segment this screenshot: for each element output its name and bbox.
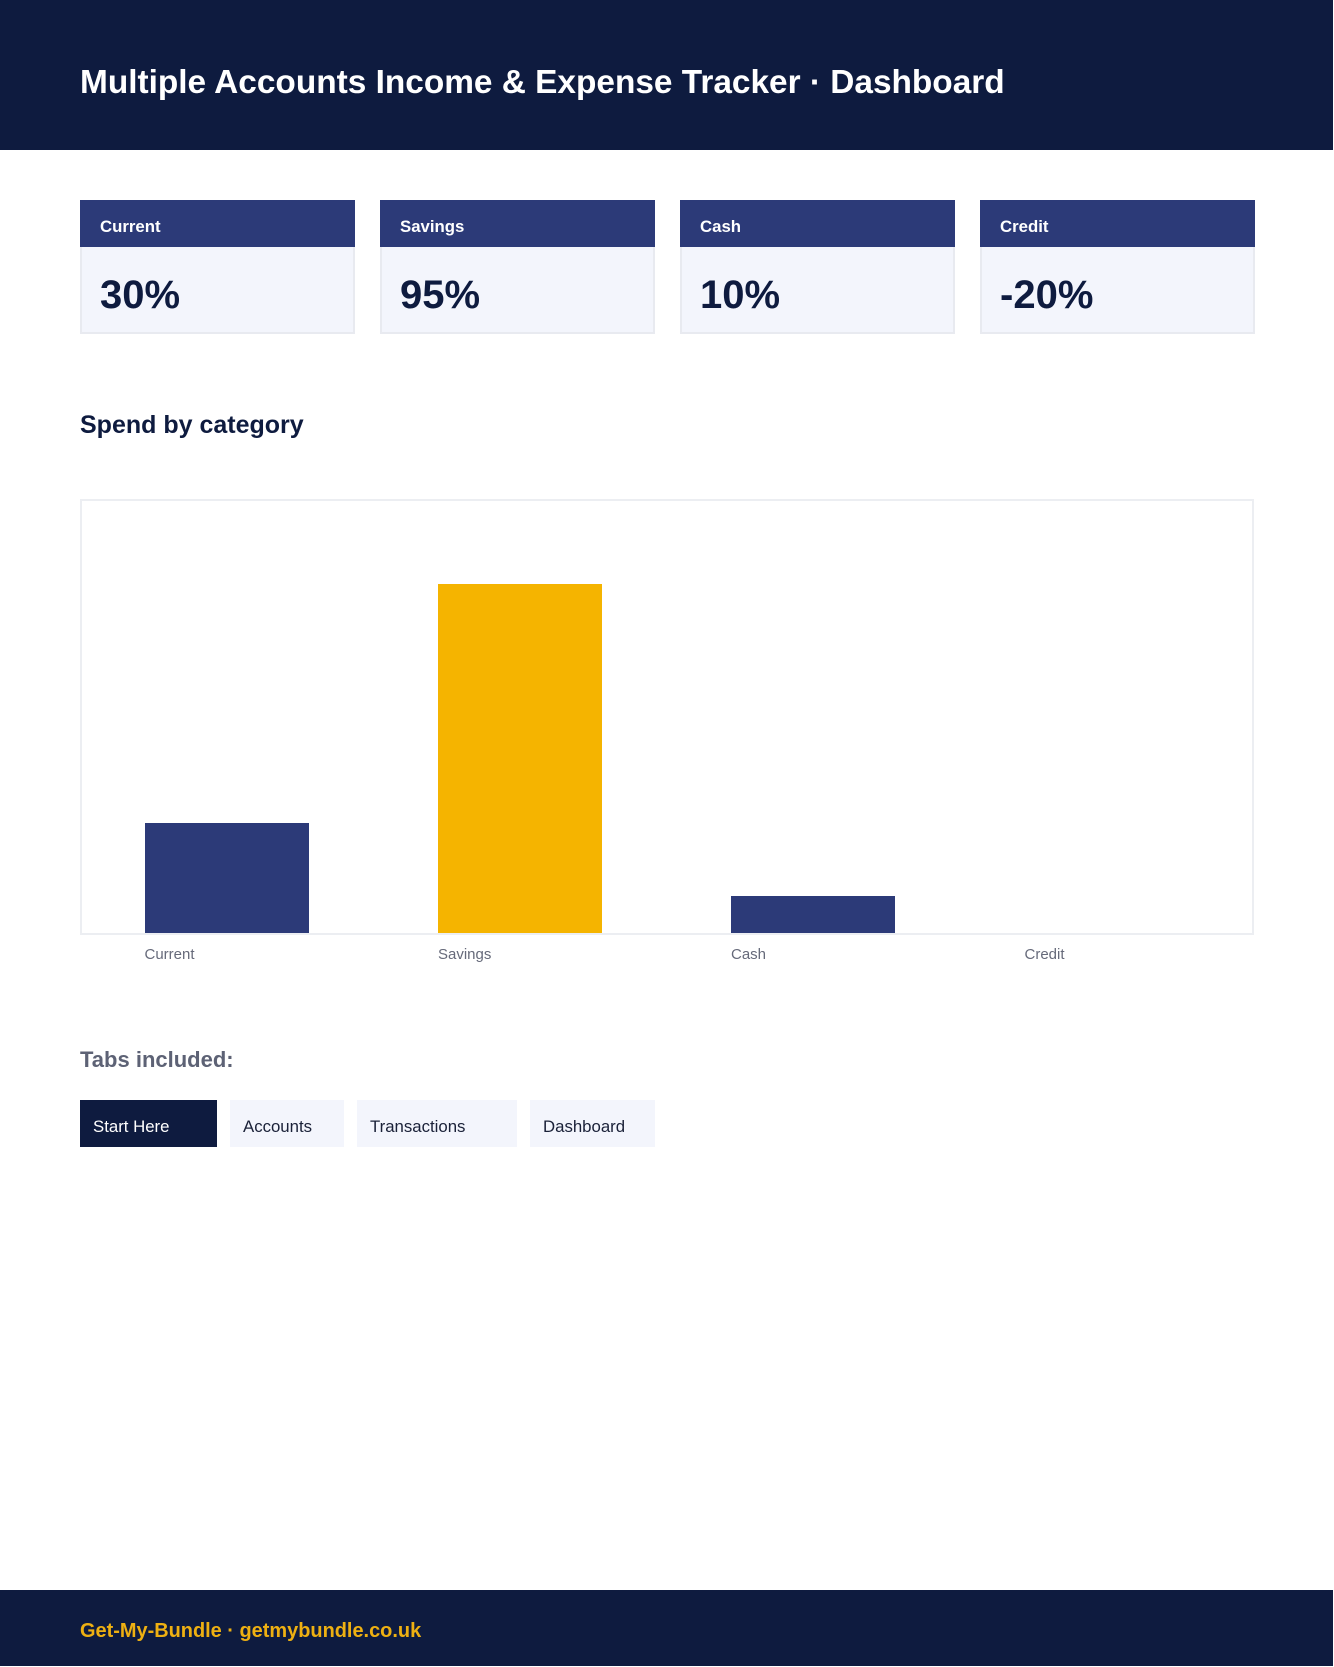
card header: Savings: Savings (400, 217, 464, 236)
axis label: Credit: Credit (1024, 946, 1065, 963)
card header: Cash: Cash (700, 217, 741, 236)
axis label: Current: Current (144, 946, 195, 963)
bar chart (80, 499, 1254, 963)
axis label: Savings: Savings (438, 946, 491, 963)
footer text: Get-My-Bundle · getmybundle.co.uk (80, 1620, 421, 1642)
value: 95%: 95% (400, 273, 480, 317)
tab: Transactions (357, 1100, 517, 1147)
card header: Credit: Credit (1000, 217, 1048, 236)
card header: Cash (680, 200, 955, 247)
value: 30%: 30% (100, 273, 180, 317)
tab: Dashboard (530, 1100, 655, 1147)
footer band (0, 1590, 1333, 1666)
chart frame (80, 499, 1254, 935)
KPI card: Current (80, 200, 355, 334)
KPI card: Credit (980, 200, 1255, 334)
KPI card: Cash (680, 200, 955, 334)
card header: Savings (380, 200, 655, 247)
tab: Accounts: Accounts (243, 1117, 312, 1136)
tab: Accounts (230, 1100, 344, 1147)
title: Multiple Accounts Income & Expense Tracker · Dashboard (80, 64, 1005, 101)
tab: Start Here: Start Here (93, 1117, 169, 1136)
value: -20%: -20% (1000, 273, 1093, 317)
card header: Current (80, 200, 355, 247)
tab: Dashboard: Dashboard (543, 1117, 625, 1136)
bar: Savings (438, 584, 602, 933)
section heading: spend by category: Spend by category (80, 411, 304, 439)
bar: Cash (731, 896, 895, 933)
value: 10%: 10% (700, 273, 780, 317)
tab: Transactions: Transactions (370, 1117, 465, 1136)
axis label: Cash: Cash (731, 946, 766, 963)
card header: Credit (980, 200, 1255, 247)
tab: Start Here (80, 1100, 217, 1147)
section heading: tabs included: Tabs included: (80, 1047, 234, 1072)
KPI card: Savings (380, 200, 655, 334)
header banner (0, 0, 1333, 150)
bar: Current (144, 823, 308, 933)
card header: Current: Current (100, 217, 161, 236)
